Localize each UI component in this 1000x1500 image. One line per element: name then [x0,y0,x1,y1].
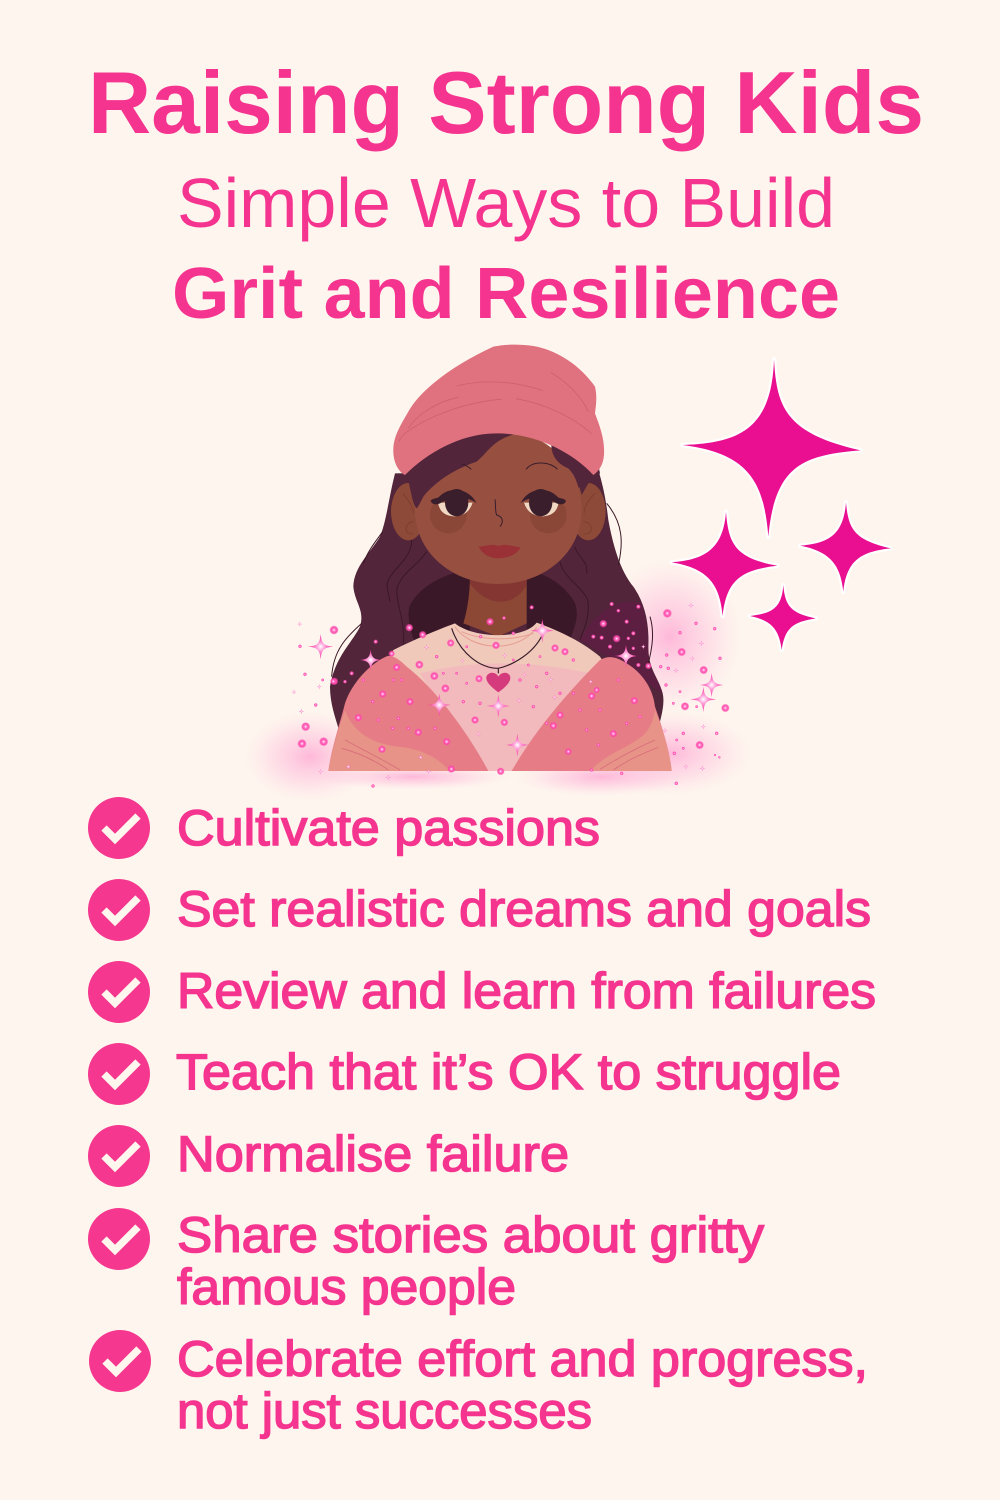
hair [330,470,663,733]
item: gritty stories [88,1207,764,1315]
item: gritty stories: famous people [177,1259,516,1315]
brows and nose [462,463,558,527]
eyes [431,489,566,516]
item: celebrate effort: Celebrate effort and progress, [177,1331,868,1387]
necklaces [452,627,542,673]
ears [391,483,606,540]
pink glow behind figure [243,557,753,803]
title: Raising Strong Kids [88,53,924,152]
pink shirt haze [420,663,590,771]
title: Simple Ways to Build [177,164,835,242]
title: Grit and Resilience [172,254,840,334]
title [88,53,924,334]
item: celebrate effort [89,1330,868,1439]
hat [393,345,604,475]
item: gritty stories: Share stories about gritty [177,1207,764,1263]
cheeks [430,497,567,533]
cardigan [328,656,672,771]
checklist [88,797,876,1439]
hair fringe [407,423,600,508]
right star [800,502,891,592]
medium star [672,512,777,616]
small star [750,585,816,650]
sparkles [291,602,724,780]
lips [478,545,521,558]
item: review failures: Review and learn from failures [177,963,876,1019]
item: set realistic dreams: Set realistic dreams and goals [177,881,871,937]
shirt [328,623,672,771]
illustration: girl with beanie [243,345,753,803]
item: ok to struggle: Teach that it’s OK to struggle [176,1044,841,1100]
neck [463,573,527,637]
large star [682,359,861,537]
face [415,430,582,584]
scattered pink dots [297,602,730,788]
item: normalise failure: Normalise failure [177,1126,569,1182]
decorative star group [672,359,891,650]
item: cultivate passions: Cultivate passions [177,800,600,856]
heart pendant [486,673,510,692]
item: celebrate effort: not just successes [177,1383,592,1439]
